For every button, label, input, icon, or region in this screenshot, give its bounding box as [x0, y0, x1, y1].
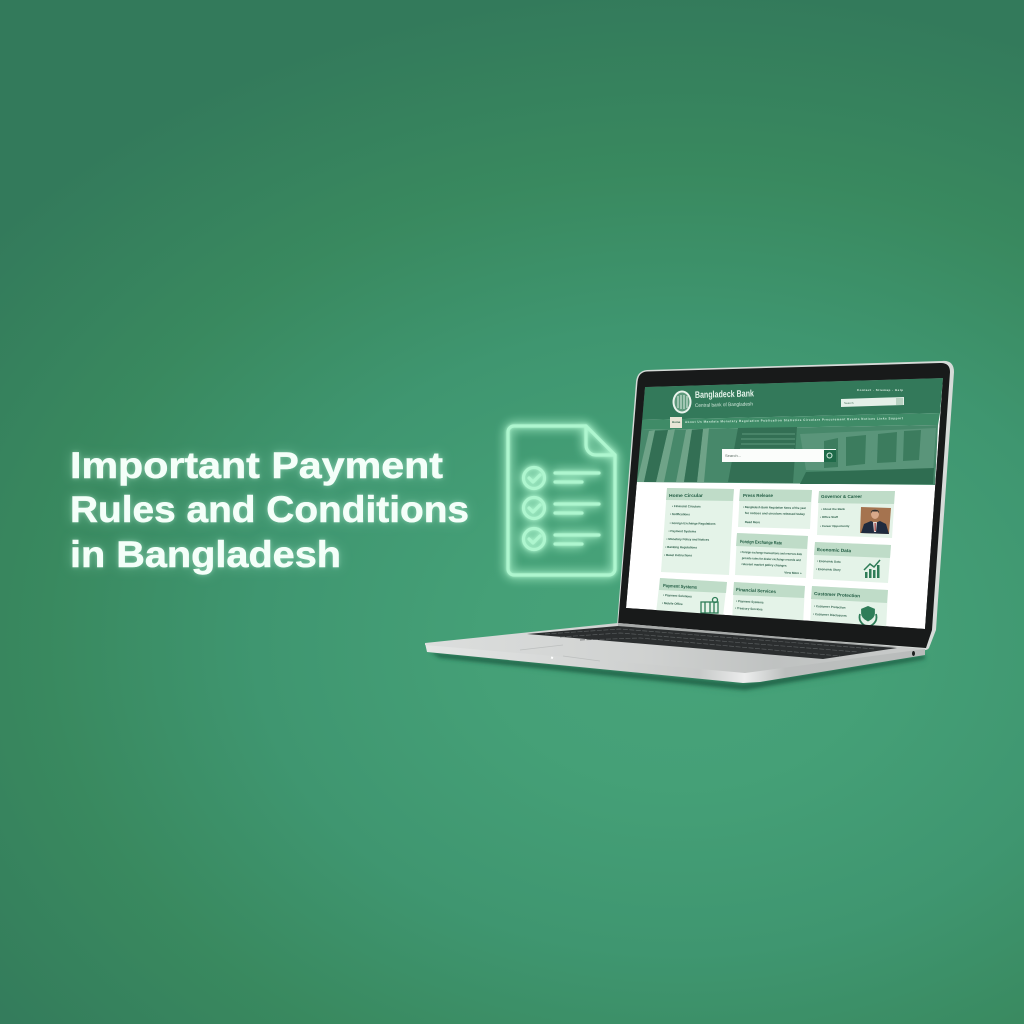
top links: Contact · Sitemap · Help: [857, 388, 903, 392]
panel: about: • Banking Regulations: [665, 545, 697, 550]
navigation bar: [641, 413, 940, 430]
panel: about: • Monetary Policy and Notices: [666, 537, 710, 542]
site name: Bangladeck Bank: [695, 388, 755, 401]
icon: glowing checklist document: [508, 426, 615, 575]
header search: [841, 397, 904, 407]
panel: financial services: [732, 582, 805, 620]
logo: [672, 390, 692, 414]
icon: shield in hands: [860, 607, 876, 627]
icon: growth chart: [864, 560, 880, 578]
title: Important Payment: [70, 445, 443, 486]
panel: customer protection: [810, 586, 888, 630]
title: [70, 445, 469, 575]
panel: about: • Basel Instructions: [664, 553, 692, 557]
navigation bar: Home: [672, 420, 681, 424]
panel: customer protection: • Customer Protection: [814, 604, 846, 610]
screen bezel: [618, 363, 950, 648]
panel: about: • Foreign Exchange Regulations: [670, 521, 716, 526]
panel: governor: Governor & Career: [821, 494, 862, 499]
base deck: [425, 623, 925, 673]
panel: press releases: for notices and circulars released today: [745, 511, 805, 516]
panel: about: Home Circular: [669, 493, 703, 498]
panel: foreign exchange: • Foreign exchange transactions and reserves data: [740, 550, 802, 556]
panel: about: • Notifications: [670, 512, 690, 516]
laptop base: [425, 623, 925, 683]
panel: foreign exchange: provide rates for dealer exchange records and: [742, 556, 801, 562]
screen: [626, 378, 943, 630]
panel: financial services: • Treasury Services: [735, 606, 763, 611]
panel: economic data: [813, 542, 891, 583]
panel: press releases: [738, 489, 812, 529]
panel: financial systems: Payment Systems: [663, 583, 698, 590]
panel: press releases: Press Release: [743, 493, 773, 498]
panel: foreign exchange: relevant market policy changes: [742, 562, 787, 568]
hero building: [637, 428, 709, 482]
panel: governor: • Career Opportunity: [820, 524, 850, 528]
panel: governor: • About the Bank: [821, 507, 845, 511]
site tagline: Central bank of Bangladesh: [695, 401, 753, 409]
panel: economic data: Economic Data: [817, 547, 852, 553]
screen background: [626, 378, 943, 629]
keyboard: [527, 626, 897, 659]
laptop contact shadow: [430, 652, 925, 690]
panel: financial services: Financial Services: [736, 587, 777, 594]
panel: about: • Payment Systems: [669, 529, 696, 534]
navigation bar: About Us Mandate Monetary Regulation Publication Statistics Circulars Procurement Events Notices Links Support: [685, 416, 903, 424]
portrait photo: [860, 507, 891, 534]
hero banner: [636, 425, 938, 485]
panel: foreign exchange: View More »: [784, 571, 802, 575]
panel: about: [661, 488, 734, 575]
panel: financial systems: • Payment Solutions: [663, 593, 692, 599]
panel: economic data: • Economic Story: [816, 567, 841, 572]
panel: press releases: Read More: [745, 520, 760, 524]
laptop lid: [617, 361, 954, 650]
panel: economic data: • Economic Data: [817, 559, 841, 564]
power port: [912, 651, 915, 656]
panel: foreign exchange: [735, 533, 808, 578]
trackpad outline: [520, 645, 600, 661]
panel: customer protection: • Customer Disclosures: [813, 612, 847, 618]
panel: governor: • Office Staff: [820, 515, 838, 519]
title: Rules and Conditions: [70, 489, 469, 530]
panel: financial systems: • Mobile Office: [662, 601, 683, 606]
site header: [642, 378, 943, 420]
header search: Search: [844, 401, 854, 405]
icon: bus: [701, 598, 718, 613]
hinge: [618, 623, 897, 649]
panel: press releases: • Bangladesh Bank Regulation News of the year: [743, 505, 807, 510]
panel: governor: [817, 491, 895, 538]
panel: about: • Financial Circulars: [672, 504, 701, 509]
panel: financial systems: [656, 578, 727, 615]
base front edge: [425, 643, 925, 683]
title: in Bangladesh: [70, 534, 341, 575]
trackpad notch: [551, 656, 553, 659]
hero search box: Search...: [725, 453, 741, 458]
laptop: [425, 361, 954, 690]
hero search box: [722, 449, 836, 462]
panel: foreign exchange: Foreign Exchange Rate: [740, 539, 783, 545]
laptop shadow: [432, 650, 925, 688]
panel: financial services: • Payment Systems: [736, 599, 764, 604]
panel: customer protection: Customer Protection: [814, 591, 860, 598]
